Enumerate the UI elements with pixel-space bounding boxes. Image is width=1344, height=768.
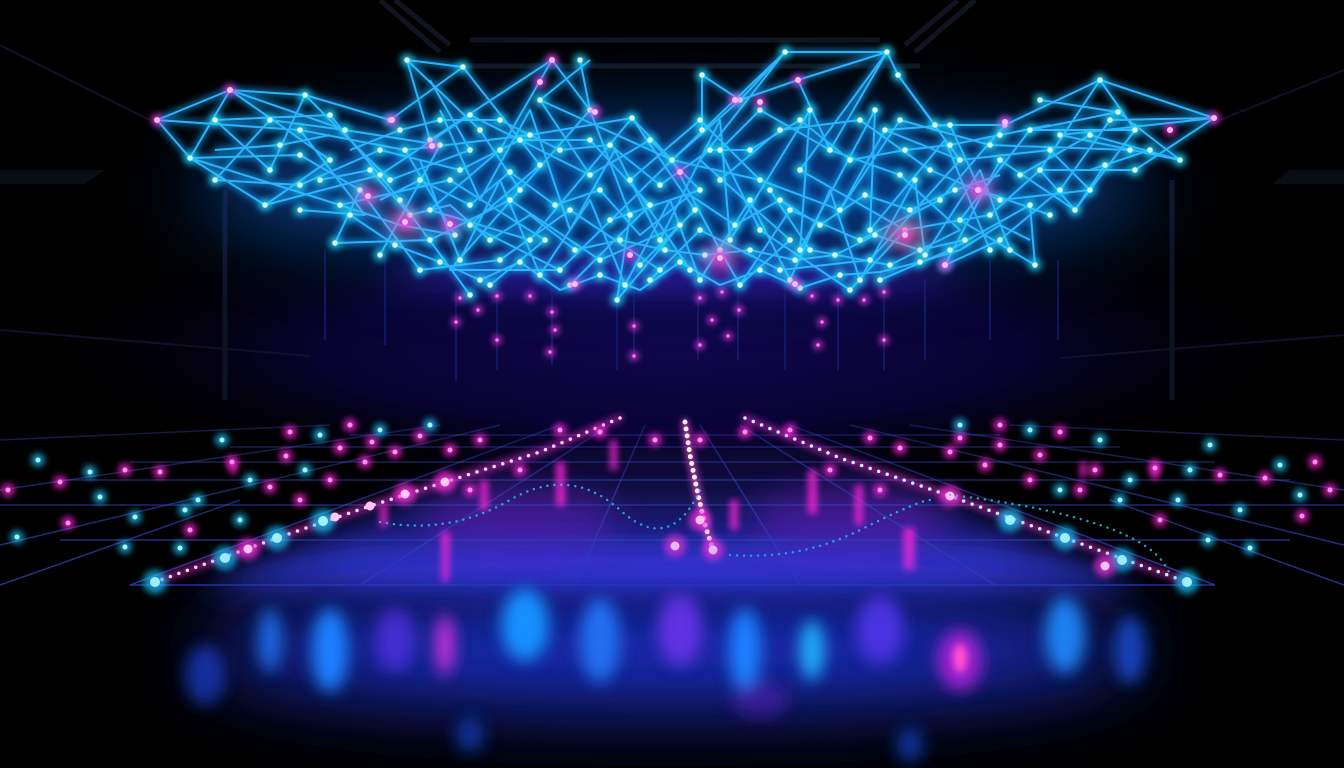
floor: vertical light streaks — [230, 440, 1158, 582]
network: connecting lines — [157, 52, 1214, 300]
floor: glow surface — [200, 425, 1140, 590]
floor: scattered particles right — [700, 425, 1330, 548]
floor: dashed cyan arcs — [380, 485, 1170, 575]
network glow haze — [192, 115, 1152, 291]
network: magenta nodes and hot spots — [157, 60, 1214, 284]
hanging threads and falling magenta particles — [325, 250, 1058, 380]
network: cyan nodes — [190, 52, 1180, 300]
floor reflection: blue and purple glow below the grid — [185, 589, 1146, 763]
floor: perspective grid — [0, 425, 1344, 585]
floor: scattered particles left — [8, 425, 655, 548]
floor: dotted light rails — [155, 418, 1187, 582]
